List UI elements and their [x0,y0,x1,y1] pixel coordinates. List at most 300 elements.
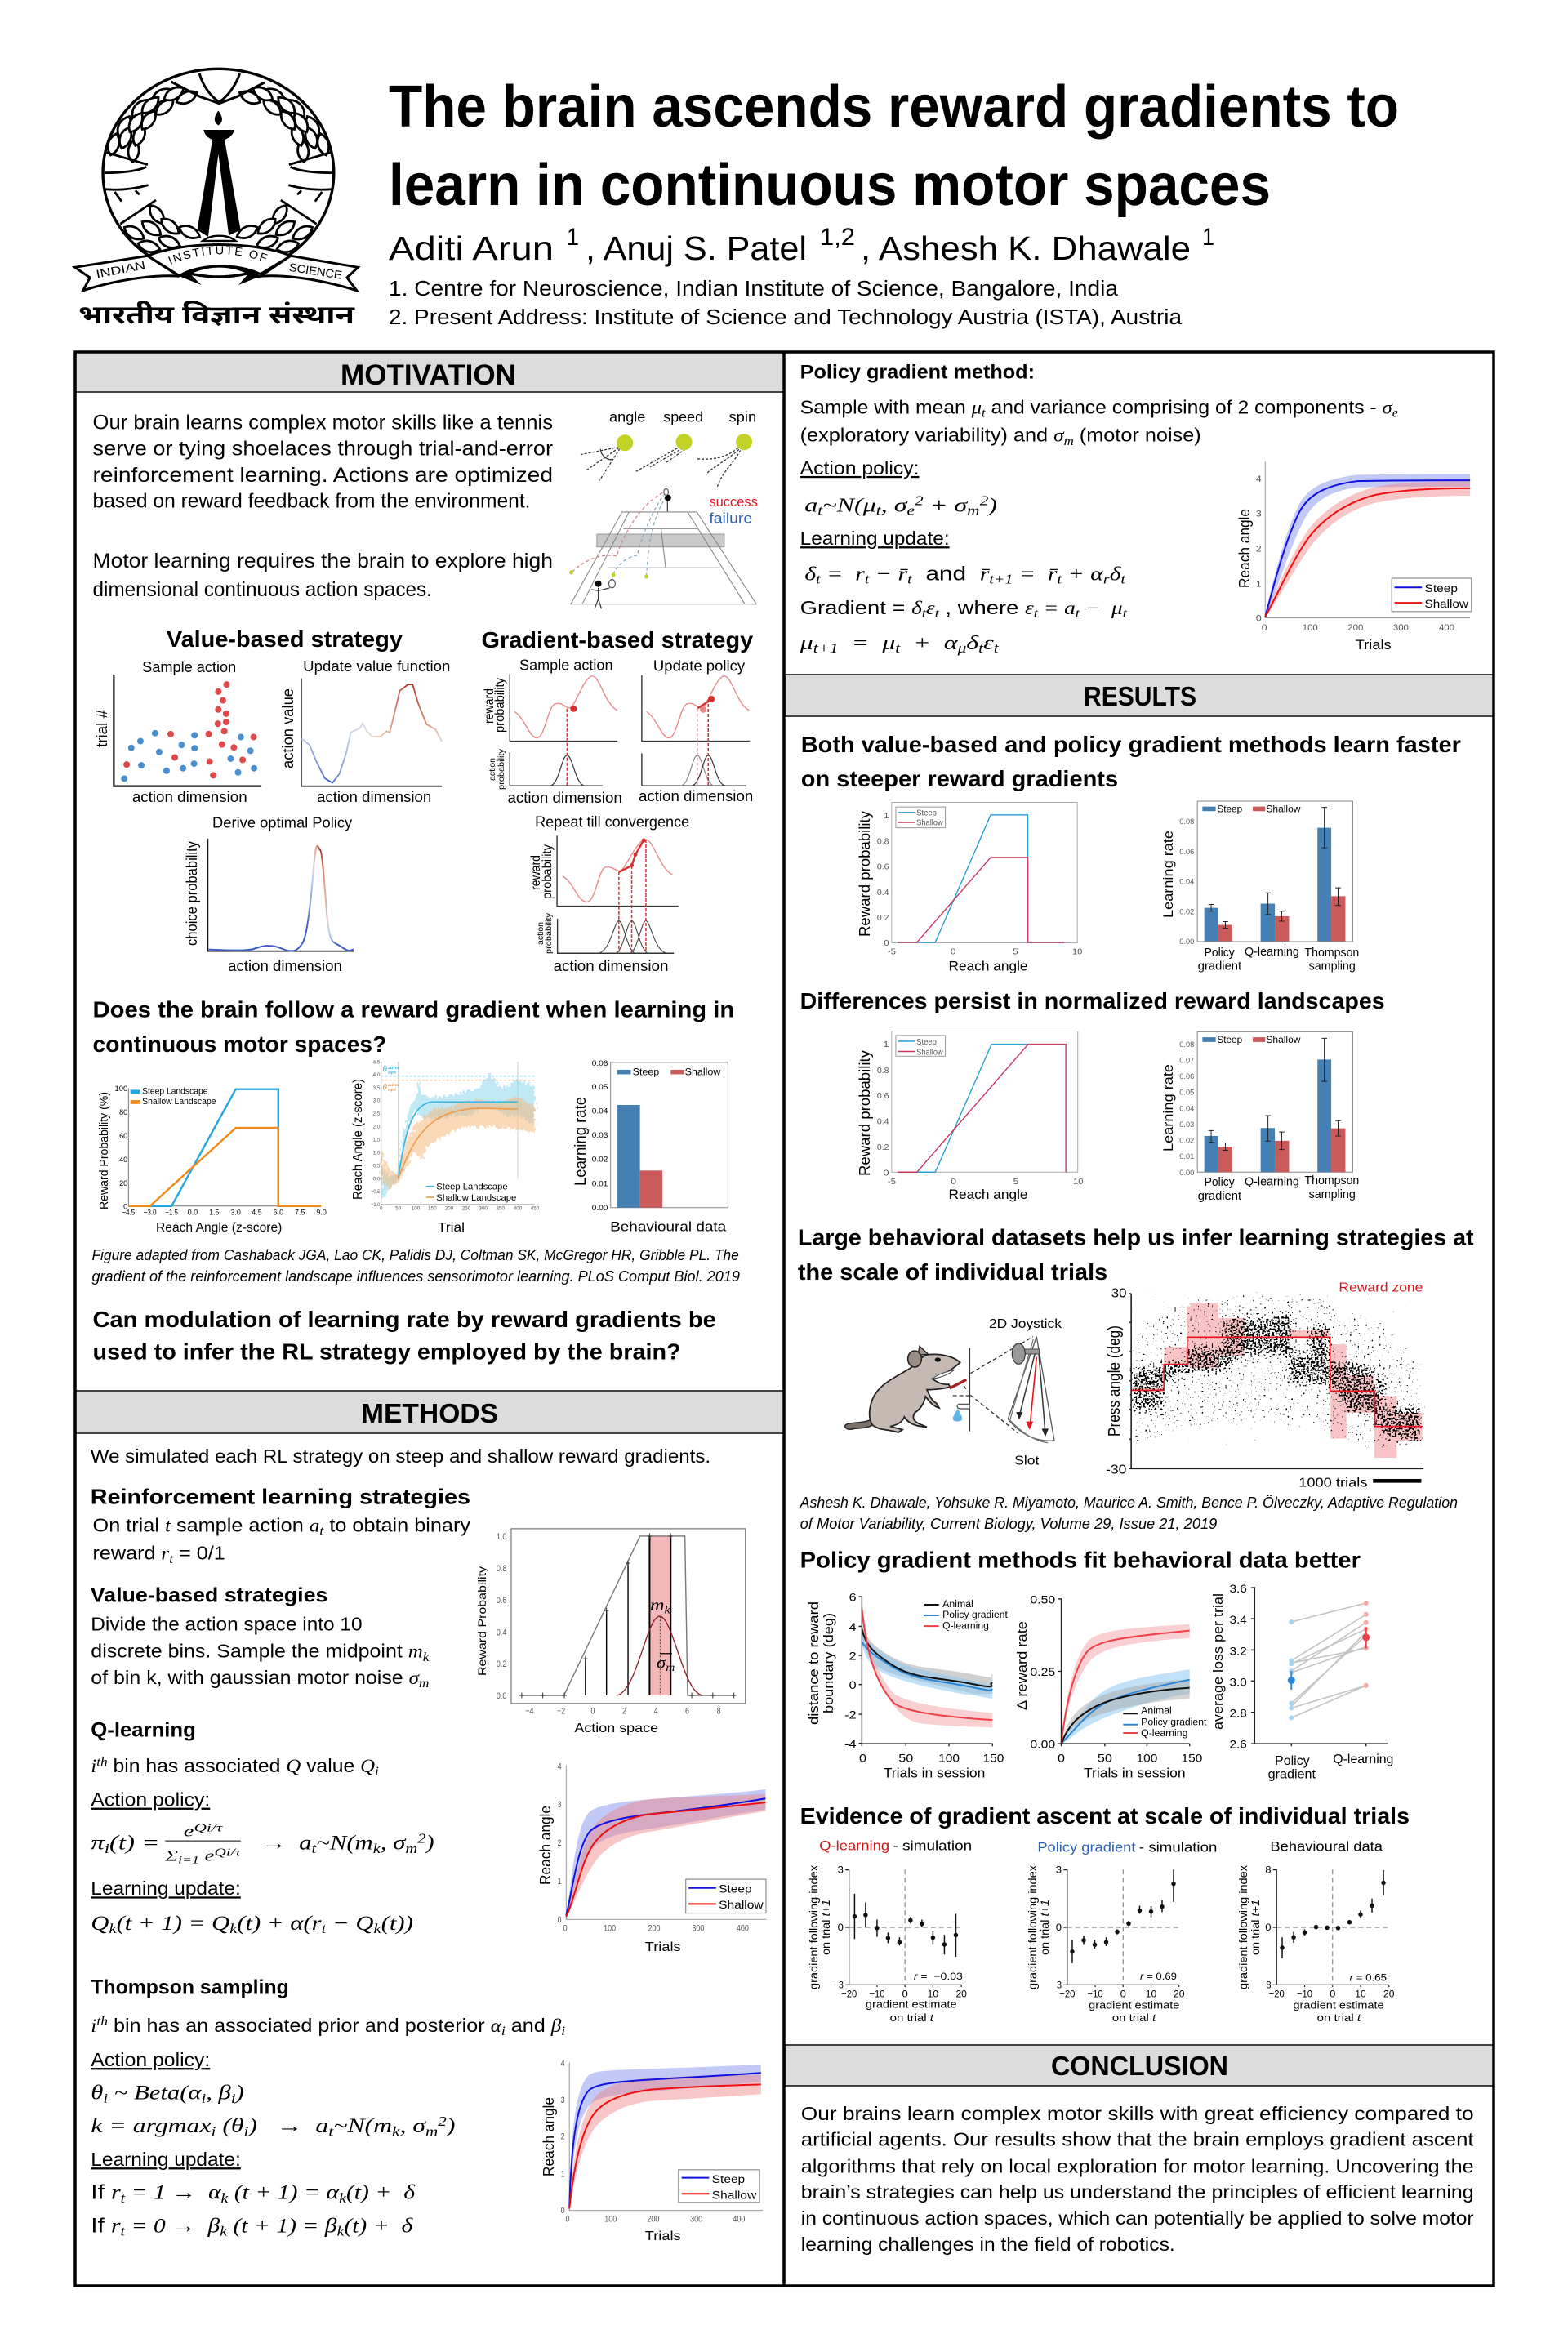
icon: tennis serve diagram: spin [729,409,756,425]
equation: reward prediction error: and [912,564,980,585]
chart: reach angle over trials [371,1059,540,1235]
chart: reward probability landscape: −3.0 [144,1208,157,1217]
chart: Q-learning reach angle: 0 [564,1923,568,1934]
chart: reward probability landscape: 80 [119,1108,128,1116]
heading: methods: METHODS [361,1398,498,1428]
chart: Q-learning reach angle [558,1762,767,1954]
chart: normalized reward landscape: 0.2 [877,1143,889,1152]
chart: reward landscape: Steep [916,808,937,817]
chart: normalized reward landscape: 0 [951,1177,957,1187]
citation: Dhawale: of Motor Variability, Current Biology, Volume 29, Issue 21, 2019 [800,1516,1218,1532]
chart: Thompson reach angle: 2 [561,2132,565,2142]
chart: policy gradient simulation [1037,1841,1217,2024]
equation: reward prediction error: t [816,572,822,586]
chart: update value function: Update value function [303,659,450,675]
equation: softmax policy: t [312,1842,317,1856]
heading: does the brain follow: Does the brain follow a reward gradient when learning in [93,997,734,1022]
equation: beta sampling: ) [234,2081,244,2104]
authors: 1 [567,224,579,251]
panel: conclusion [785,2045,1494,2255]
chart: delta reward rate: Q-learning [1141,1728,1187,1739]
text: trial description: On trial t sample action a [93,1514,317,1536]
chart: reward function with bins: −4 [525,1707,534,1717]
chart: update value function [301,659,450,806]
text: discretisation: m [419,1677,429,1691]
chart: reward function with bins: 0.4 [497,1628,507,1638]
equation: reward prediction error: + α [1062,563,1103,585]
chart: reward landscape: -5 [888,947,896,956]
affiliations: 2. Present Address: Institute of Science and Technology Austria (ISTA), Austria [389,306,1183,329]
axis labels: motivation charts: action value [280,688,297,768]
chart: Q-learning reach angle: 3 [558,1800,562,1810]
equation: softmax policy: ~N(m [316,1832,373,1854]
chart: normalized reward landscape: -5 [888,1177,896,1187]
equation: beta sampling: i [244,2124,248,2140]
chart: Q-learning simulation: - simulation [893,1839,972,1854]
equation: Q update: − Q [326,1912,374,1934]
chart: Thompson reach angle: Shallow [712,2189,757,2202]
heading: motivation: MOTIVATION [341,359,516,391]
chart: reward function with bins: 6 [685,1707,689,1717]
text: learning update label: Learning update: [91,2149,241,2170]
equation: gradient: t [922,608,927,621]
chart: reach angle over trials: 2.5 [373,1111,381,1117]
poster frame [75,352,1494,2286]
chart: behavioural learning rate bars: 0.01 [592,1179,608,1188]
equation: softmax policy [91,1821,434,1866]
equation: reward prediction error: t [1058,572,1063,586]
equation: action policy: t [876,503,882,518]
chart: policy gradient simulation: −20 [1059,1989,1075,2000]
text: Q value: i [375,1765,379,1780]
chart: behavioural data gradient index: −8 [1261,1980,1272,1991]
chart: derive optimal policy: Derive optimal Policy [212,815,353,831]
equation: softmax policy: k [373,1842,381,1856]
chart: reach angle over trials: 0.5 [373,1163,381,1169]
icon: tennis serve diagram: success [709,494,758,510]
heading: value-based strategies: Value-based strategies [91,1584,327,1606]
text block: conclusion: learning challenges in the field of robotics. [801,2234,1175,2255]
heading: Thompson sampling: Thompson sampling [91,1976,289,1998]
equation: beta sampling: t [328,2124,334,2140]
authors: Aditi Arun [389,229,554,267]
chart: policy gradient reach angle: Shallow [1425,597,1468,611]
equation: action policy: 2 [915,493,924,508]
heading: Q-learning: Q-learning [91,1718,196,1741]
chart: reach angle over trials: 400 [514,1205,523,1211]
chart: reward probability landscape: 7.5 [295,1208,305,1217]
text: action policy label: Action policy: [800,458,920,479]
chart: reach angle over trials: 50 [395,1205,402,1211]
chart: reward function with bins: −2 [557,1707,566,1717]
chart: Q-learning reach angle: Steep [719,1882,752,1895]
panel: policy gradient method [799,362,1472,656]
chart: learning rates on steep and shallow: Thompson [1305,946,1359,960]
chart: distance to reward boundary: Trials in session [884,1766,985,1781]
equation: reward prediction error: − r̄ [869,563,909,585]
results part one [801,733,1461,973]
chart: behavioural data gradient index: 8 [1265,1865,1272,1876]
chart: Q-learning reach angle: 2 [558,1838,562,1848]
chart: behavioural learning rate bars: Shallow [685,1067,721,1078]
chart: reach angle over trials: 250 [462,1205,471,1211]
equation: reward prediction error: t [1121,572,1127,586]
equation: softmax policy: π [91,1832,99,1854]
axis labels: motivation charts: action [537,922,546,945]
chart: average loss per trial: gradient [1268,1766,1316,1781]
chart: reward function with bins: 2 [622,1707,626,1717]
chart: reward probability landscape: −4.5 [122,1208,135,1217]
chart: behavioural learning rate bars: Steep [633,1067,659,1078]
chart: reward landscape: 0 [884,938,889,948]
axis labels: results row three: on trial t+1 [819,1900,832,1955]
equation: reward prediction error: = r [821,563,866,585]
equation: gradient: t [935,608,939,621]
chart: repeat till convergence: Repeat till convergence [535,814,689,831]
chart: reward landscape: 10 [1072,947,1082,956]
chart: reach angle over trials: Steep Landscape [436,1183,508,1192]
heading: both methods learn faster [801,733,1461,792]
panel: results [785,675,1494,2024]
equation: Thompson updates: k [339,2190,346,2206]
chart: learning rates on normalized landscapes: 0.05 [1179,1089,1195,1097]
chart: reward probability landscape: 6.0 [274,1208,283,1217]
equation: beta sampling: k = argmax [91,2114,167,2137]
chart: Q-learning simulation: −10 [869,1989,884,2000]
equation: Q update: (t)) [381,1912,413,1934]
chart: policy gradient simulation: r = 0.69 [1140,1971,1177,1982]
equation: action policy: e [907,503,915,518]
chart: policy gradient reach angle: 300 [1393,622,1409,633]
text: prior and posterior: bin has an associated prior and posterior [108,2016,491,2036]
text: Q value: Q value Q [286,1755,371,1777]
equation: Q update: t [322,1922,327,1937]
chart: policy gradient simulation: 3 [1056,1865,1062,1876]
chart: learning rates on steep and shallow: Shallow [1266,803,1301,814]
equation: beta sampling: m [425,2124,438,2140]
chart: delta reward rate: 50 [1098,1752,1112,1765]
text: discretisation: k [423,1650,430,1664]
chart: reward function with bins: 0 [590,1707,595,1717]
chart: Q-learning simulation: 20 [956,1989,967,2000]
chart: reward landscape: 0.4 [877,888,889,898]
text block: continuous action spaces [93,549,553,601]
heading: conclusion [785,2045,1494,2086]
chart: reward landscape: 1 [884,811,889,821]
equation: action policy: t [817,503,824,518]
illustration: rat with joystick: 2D Joystick [989,1317,1062,1331]
equation: reward prediction error: t [865,572,871,586]
chart: press angle scatter: 30 [1111,1285,1127,1300]
chart: Q-learning simulation: 3 [838,1865,844,1876]
chart: normalized reward landscape: 1 [883,1040,889,1049]
results part two [798,988,1474,1532]
chart: normalized reward landscape: Steep [916,1037,937,1047]
chart: update policy: action dimension [639,788,753,805]
equation: Thompson updates: (t + 1) = α [228,2181,340,2203]
chart: reward function with bins: 8 [717,1707,721,1717]
equation: softmax policy: i=1 [178,1855,199,1866]
equation: reward prediction error: r [1103,572,1110,586]
chart: learning rates on normalized landscapes [1179,1031,1359,1203]
equation: beta sampling: ) → a [247,2114,328,2137]
chart: policy gradient reach angle: 3 [1256,509,1262,519]
panel: motivation [75,352,784,1365]
chart: Q-learning reach angle: 100 [604,1923,616,1934]
chart: Q-learning simulation [819,1839,972,2024]
equation: mean update: t+1 [813,641,839,656]
equation: Thompson updates: t [121,2190,126,2206]
chart: policy gradient reach angle: 4 [1256,474,1262,484]
chart: Thompson reach angle: 4 [561,2059,565,2069]
heading: motivation [75,352,784,392]
text: sampling description: and variance comprising of 2 components - [986,398,1383,418]
motivation lower content [91,997,740,1365]
chart: derive optimal policy [207,815,354,975]
chart: distance to reward boundary: 4 [849,1620,857,1633]
chart: reward landscape: 0 [951,947,956,956]
chart: Q-learning simulation: 0 [838,1922,844,1933]
chart: reward function with bins: 0.8 [497,1564,507,1574]
chart: distance to reward boundary: 0 [859,1752,866,1765]
equation: beta sampling [91,2081,455,2140]
equation: action policy: a [804,494,816,516]
axis labels: results row two: Reward probability [857,1050,873,1176]
chart: Thompson reach angle: 1 [561,2169,565,2180]
equation: Thompson updates: (t + 1) = β [227,2214,337,2237]
axis labels: methods charts: Reach angle [537,1806,554,1885]
chart: learning rates on steep and shallow: sampling [1309,960,1356,973]
chart: delta reward rate [1030,1592,1206,1781]
text: discretisation: Divide the action space into 10 [91,1615,363,1635]
equation: reward prediction error: t+1 [989,572,1013,586]
equation: beta sampling: , σ [399,2114,426,2137]
authors: , Anuj S. Patel [586,229,807,267]
chart: distance to reward boundary: 50 [898,1752,914,1765]
equation: mean update: + α [900,631,958,654]
equation: gradient: − μ [1080,598,1123,619]
text: sampling description [800,398,1398,448]
chart: behavioural data gradient index: 10 [1355,1989,1366,2000]
axis labels: methods charts [475,1566,557,2176]
chart: policy gradient simulation: −10 [1088,1989,1103,2000]
heading: results [785,675,1494,716]
chart: average loss per trial: 3.4 [1229,1613,1247,1626]
chart: Q-learning simulation: 0 [902,1989,908,2000]
axis labels: motivation charts: reward [483,688,497,724]
axis labels: motivation charts: action [488,758,497,781]
chart: normalized reward landscape: Reach angle [948,1187,1028,1201]
chart: reward probability landscape: 4.5 [252,1208,262,1217]
equation: Thompson updates: t [121,2224,126,2239]
chart: press angle scatter: 1000 trials [1298,1476,1368,1490]
chart: policy gradient reach angle: 200 [1348,622,1364,633]
chart: Thompson reach angle: Steep [712,2173,745,2185]
heading: policy gradient fits better: Policy gradient methods fit behavioral data better [800,1548,1361,1573]
text: trial description: t [169,1552,174,1566]
citation: Cashaback [91,1247,740,1285]
chart: policy gradient simulation: Policy gradient [1037,1841,1136,1855]
institute logo: INSTITUTE OF [168,246,268,265]
axis labels: results row three: distance to reward [806,1601,822,1725]
equation: mean update: μ [956,641,967,656]
equation: reward prediction error: δ [1110,563,1122,585]
equation: gradient: , where [939,598,1025,619]
authors: , Ashesh K. Dhawale [861,229,1191,267]
equation: beta sampling: ) [444,2114,455,2137]
heading: both methods learn faster: Both value-based and policy gradient methods learn faster [801,733,1461,757]
equation: action policy: m [967,503,980,518]
chart: normalized reward landscape: Shallow [916,1048,943,1057]
chart: delta reward rate: 0.25 [1030,1665,1055,1678]
chart: reward landscape: 0.6 [877,862,889,872]
chart: learning rates on normalized landscapes: Q-learning [1245,1174,1299,1188]
text block: motor skills: based on reward feedback from the environment. [93,488,531,512]
text: discretisation: of bin k, with gaussian motor noise σ [91,1667,416,1688]
chart: Q-learning reach angle: 1 [558,1877,562,1886]
chart: reach angle over trials: 350 [496,1205,505,1211]
text: sampling description: t [982,407,986,420]
equation: beta sampling: i [231,2091,236,2106]
text: trial description: t [319,1524,324,1539]
text: sampling description: e [1392,407,1398,420]
chart: policy gradient simulation: - simulation [1139,1841,1217,1855]
chart: behavioural data gradient index: 20 [1383,1989,1395,2000]
axis labels: motivation charts: choice probability [184,841,200,946]
axis labels: landscape charts: Learning rate [572,1097,590,1186]
axis labels: motivation charts [94,678,555,954]
chart: Q-learning reach angle: Trials [645,1940,681,1954]
chart: learning rates on normalized landscapes: 0.01 [1179,1153,1195,1161]
chart: policy gradient simulation: 20 [1174,1989,1184,2000]
chart: delta reward rate: Trials in session [1084,1766,1186,1781]
equation: gradient: ε [1025,598,1034,619]
chart: reach angle over trials: 3.0 [373,1098,381,1104]
chart: Q-learning simulation: 10 [928,1989,938,2000]
chart: reach angle over trials: θ [382,1066,387,1075]
text: trial description [93,1514,471,1566]
axis labels: results row three: average loss per trial [1210,1593,1226,1730]
chart: normalized reward landscape: 0.4 [877,1117,889,1126]
axis labels: results row three: gradient following index [1236,1865,1250,1989]
chart: delta reward rate: 0.00 [1030,1738,1055,1751]
chart: Thompson reach angle: 200 [647,2215,660,2225]
chart: reach angle over trials: 1.0 [373,1150,381,1156]
chart: reward function with bins: 4 [654,1707,658,1717]
chart: delta reward rate: 0.50 [1030,1592,1055,1606]
text: trial description: = 0/1 [173,1544,225,1564]
chart: average loss per trial [1229,1582,1393,1781]
equation: softmax policy: i [105,1842,109,1856]
text: prior and posterior: th [96,2015,108,2029]
motivation content [93,409,758,975]
chart: Thompson reach angle: 100 [604,2215,617,2225]
equation: gradient: t [1123,608,1127,621]
chart: distance to reward boundary: 0 [849,1678,857,1691]
equation: Thompson updates [91,2180,416,2239]
title: The brain ascends reward gradients to [389,74,1399,140]
institute logo: SCIENCE [288,261,343,282]
chart: Q-learning simulation: on trial t [890,2012,933,2024]
chart: policy gradient reach angle: 100 [1303,622,1318,633]
equation: reward prediction error: r̄ [980,563,988,585]
chart: reward probability landscape: 3.0 [230,1208,241,1217]
text: prior and posterior: β [550,2015,562,2036]
affiliations [389,278,1183,329]
citation: Cashaback: gradient of the reinforcement landscape influences sensorimotor learning. PLoS Comput Biol. 2019 [91,1268,740,1285]
chart: reach angle over trials: opt [388,1071,396,1076]
chart: gradient sample action: Sample action [519,657,613,674]
chart: behavioural learning rate bars: 0.06 [592,1059,608,1068]
chart: reach angle over trials: aim [388,1083,399,1088]
text: prior and posterior: and [506,2016,551,2036]
citation: Cashaback: Figure adapted from Cashaback JGA, Lao CK, Palidis DJ, Coltman SK, McGregor HR, Gribble PL. The [91,1247,739,1263]
equation: Q update: (t + 1) = Q [117,1912,230,1934]
text block: motor skills: reinforcement learning. Actions are optimized [93,463,553,487]
title [389,74,1399,218]
chart: reward landscape: 0.8 [877,837,889,846]
text block: motor skills: serve or tying shoelaces through trial-and-error [93,437,553,460]
chart: behavioural data gradient index: r = 0.65 [1350,1973,1387,1984]
chart: learning rates on steep and shallow: 0.08 [1179,817,1194,826]
institute logo: भारतीय विज्ञान संस्थान [78,301,355,334]
chart: reward probability landscape: 20 [119,1179,128,1187]
chart: reach angle over trials: Shallow Landscape [436,1193,516,1203]
equation: action policy: + σ [924,494,969,516]
chart: learning rates on steep and shallow: Q-learning [1245,945,1299,959]
chart: distance to reward boundary: -4 [844,1737,857,1750]
chart: policy gradient reach angle: Trials [1356,637,1392,653]
chart: reward probability landscape: 9.0 [316,1208,327,1217]
chart: average loss per trial: 2.6 [1229,1738,1247,1751]
text: trial description: to obtain binary [323,1515,471,1536]
chart: Q-learning simulation: Q-learning [819,1839,889,1854]
chart: average loss per trial: 2.8 [1229,1707,1247,1720]
chart: update value function: action dimension [317,789,431,806]
equation: mean update: ε [983,631,995,654]
icon: tennis serve diagram [571,409,758,608]
chart: reward probability landscape: Steep Landscape [142,1086,207,1096]
equation: softmax policy: Qi/τ [194,1821,223,1834]
axis labels: results row three: boundary (deg) [821,1613,836,1713]
chart: behavioural data gradient index: Behavioural data [1270,1840,1383,1855]
chart: average loss per trial: 3.2 [1229,1644,1247,1658]
chart: reach angle over trials: 0.0 [373,1176,381,1182]
chart: behavioural data gradient index: 0 [1330,1989,1335,2000]
chart: normalized reward landscape [877,1031,1084,1201]
axis labels: results row two: Press angle (deg) [1106,1325,1124,1437]
chart: reach angle over trials: Trial [438,1221,465,1235]
axis labels: results row three: on trial t+1 [1249,1900,1262,1955]
equation: Q update: (t) + α(r [237,1912,322,1934]
chart: policy gradient simulation: on trial t [1112,2012,1156,2024]
axis labels: motivation charts: probability [541,844,555,899]
heading: policy gradient method: Policy gradient method: [800,362,1035,383]
chart: reward function with bins: k [665,1604,670,1616]
chart: behavioural learning rate bars: 0.05 [592,1083,608,1091]
chart: normalized reward landscape: 0.6 [877,1091,889,1101]
axis label: policy gradient chart: Reach angle [1236,509,1253,588]
axis labels: results row one [857,811,1176,937]
chart: Q-learning simulation: −20 [841,1989,857,2000]
equation: gradient: ε [926,598,935,619]
equation: action policy: , σ [881,494,908,516]
equation: softmax policy: → a [261,1832,294,1854]
chart: sample action scatter: action dimension [132,789,247,806]
chart: reward probability landscape: 100 [115,1085,128,1093]
equation: softmax policy: m [405,1842,417,1856]
chart: learning rates on normalized landscapes: 0.02 [1179,1137,1195,1145]
